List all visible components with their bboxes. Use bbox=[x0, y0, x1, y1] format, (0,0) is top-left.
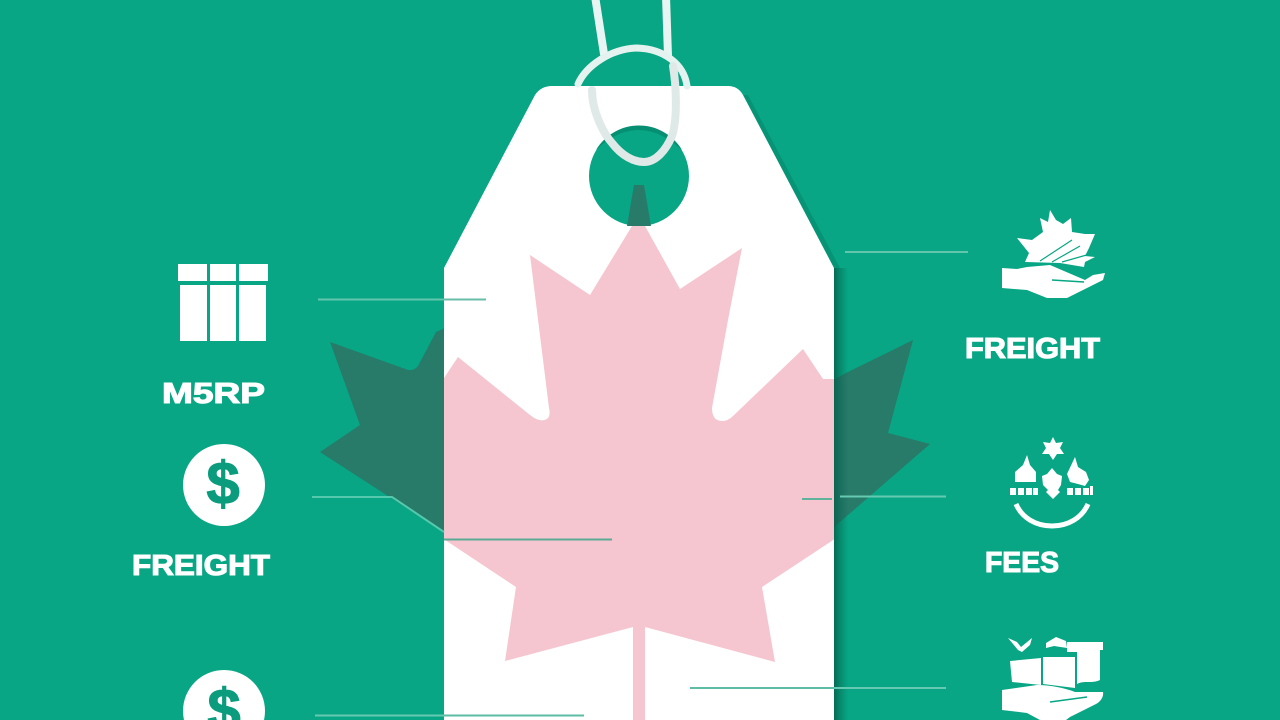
tag shadow bbox=[743, 95, 848, 720]
icon: hand holding maple leaf bbox=[1002, 210, 1105, 298]
right item: freight bbox=[965, 210, 1105, 365]
right item: fees bbox=[985, 437, 1093, 579]
label: FEES bbox=[985, 547, 1059, 579]
hole inner shade bbox=[596, 126, 682, 150]
icon: smile with small glyphs bbox=[1010, 437, 1093, 526]
string loop bbox=[578, 0, 687, 162]
dark leaf tip in hole bbox=[627, 185, 651, 226]
label: FREIGHT bbox=[965, 333, 1100, 365]
price tag with maple leaf bbox=[430, 86, 850, 720]
right item: hand holding products bbox=[1002, 637, 1103, 720]
icon: box bbox=[178, 264, 268, 341]
label: FREIGHT bbox=[132, 550, 270, 582]
pink maple leaf bbox=[430, 226, 850, 720]
leader lines bbox=[312, 252, 968, 716]
left item: freight bbox=[132, 444, 270, 582]
icon: dollar coin: $ bbox=[206, 450, 240, 517]
label: M5RP bbox=[162, 378, 265, 410]
left item: bottom coin bbox=[183, 670, 265, 720]
left item: MSRP bbox=[162, 264, 268, 410]
dark maple leaf shadow behind tag bbox=[320, 328, 930, 533]
tag hole bbox=[589, 126, 689, 226]
